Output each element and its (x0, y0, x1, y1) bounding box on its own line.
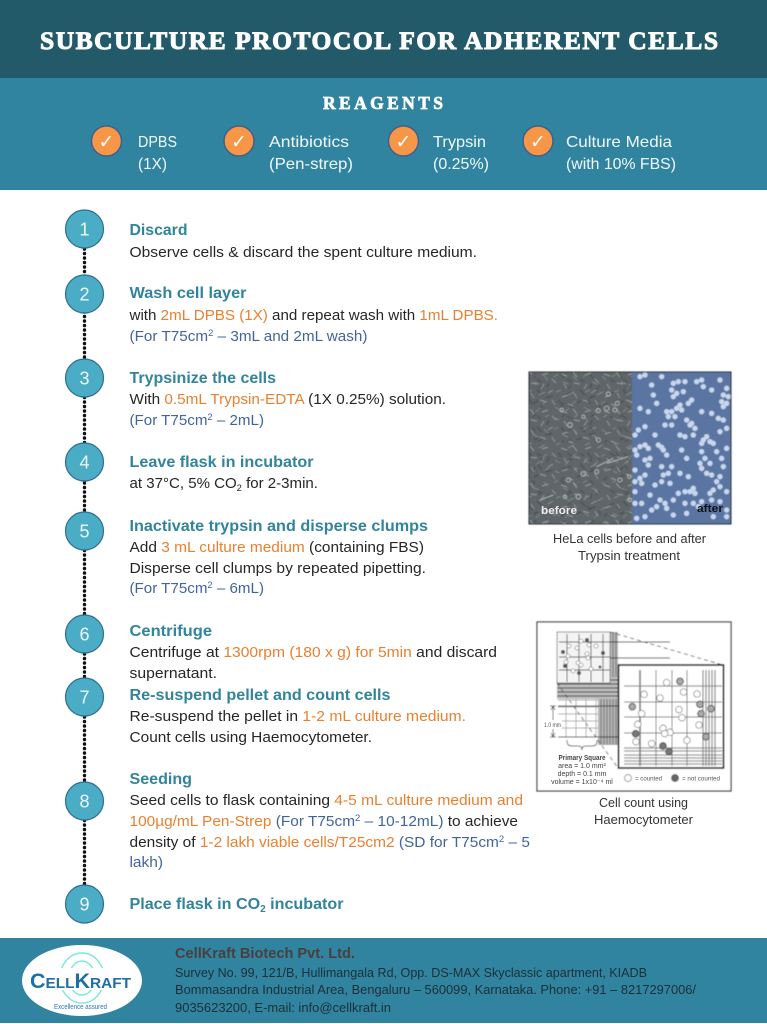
header banner (0, 0, 767, 78)
step 8: Seeding (130, 771, 192, 788)
step 7: 7 (79, 688, 90, 708)
step 8: 2 (355, 813, 360, 823)
step 3: With 0.5mL Trypsin-EDTA (1X 0.25%) solution. (130, 392, 446, 408)
step 9: Place flask in CO (130, 896, 259, 913)
step 5: Disperse cell clumps by repeated pipetting. (130, 561, 426, 577)
step 9 (66, 885, 344, 923)
caption: HeLa cells before and after (553, 531, 707, 546)
step 1: Discard (130, 222, 188, 239)
step 9: 2 (260, 904, 266, 915)
step 2: (For T75cm (130, 329, 204, 345)
light primary square (557, 632, 610, 683)
step 1: 1 (79, 220, 90, 240)
step 4: 4 (79, 452, 90, 472)
diagram labels: area = 1.0 mm² (558, 763, 606, 770)
dashed zoom lines (557, 632, 723, 768)
reagent: antibiotics: ✓ (231, 131, 247, 153)
step 6: 6 (79, 624, 90, 644)
step 2: – 3mL and 2mL wash) (213, 329, 368, 345)
step 4: for 2-3min. (242, 476, 318, 492)
reagent: antibiotics: Antibiotics (269, 134, 349, 151)
step 2: with 2mL DPBS (1X) and repeat wash with 1mL DPBS. (128, 308, 498, 324)
step 8: lakh) (130, 855, 163, 871)
figure: HeLa cells before and after trypsin (529, 372, 731, 563)
step 8: 8 (79, 792, 90, 812)
step 5: 5 (79, 522, 90, 542)
diagram labels: volume = 1x10⁻⁴ ml (551, 779, 613, 786)
reagent: antibiotics (224, 126, 353, 173)
panel: reagents (0, 78, 767, 190)
step 8: density of 1-2 lakh viable cells/T25cm2 (SD for T75cm (130, 835, 493, 851)
step 4: Leave flask in incubator (130, 454, 314, 471)
reagent: DPBS: ✓ (99, 131, 114, 153)
haemocytometer diagram (537, 622, 731, 791)
diagram labels: depth = 0.1 mm (558, 771, 607, 778)
step 9: 9 (79, 894, 90, 914)
step 3: 2 (207, 412, 213, 422)
caption: Haemocytometer (594, 812, 694, 827)
reagent: trypsin (388, 126, 489, 173)
step 8: to achieve (447, 814, 514, 830)
step 1: Observe cells & discard the spent culture medium. (130, 245, 477, 261)
step 3: 3 (79, 368, 90, 388)
company name: CellKraft Biotech Pvt. Ltd. (175, 946, 355, 962)
step 5: (For T75cm (130, 581, 204, 597)
step 5: 2 (207, 580, 213, 590)
logo: CellKraft (22, 945, 142, 1016)
inset enlarged square (618, 665, 724, 768)
step 6 (66, 615, 497, 682)
step 2: Wash cell layer (130, 285, 246, 302)
logo: CellKraft: CELLKRAFT (30, 970, 131, 993)
step 2 (66, 275, 498, 345)
reagent: DPBS (92, 126, 177, 173)
step 5: Add 3 mL culture medium (containing FBS) (130, 540, 424, 556)
step 4: 2 (237, 483, 242, 493)
step 3: – 2mL) (213, 413, 264, 429)
title: SUBCULTURE PROTOCOL FOR ADHERENT CELLS (40, 26, 718, 55)
step 4 (66, 443, 318, 493)
step 3: (For T75cm (130, 413, 204, 429)
reagent: trypsin: ✓ (396, 131, 411, 153)
timeline connector (83, 240, 86, 895)
address text: 9035623200, E-mail: info@cellkraft.in (175, 1000, 391, 1015)
step 2: 2 (79, 284, 90, 304)
address text (175, 965, 696, 1015)
diagram labels: 1.0 mm (544, 723, 561, 729)
reagent: DPBS: DPBS (138, 134, 177, 151)
label: after: after (697, 503, 724, 515)
address text: Bommasandra Industrial Area, Bengaluru – 560099, Karnataka. Phone: +91 – 8217297006/ (175, 982, 696, 997)
diagram labels: = not counted (682, 776, 720, 782)
caption: Trypsin treatment (578, 548, 680, 563)
step 7: Re-suspend the pellet in 1-2 mL culture medium. (130, 709, 466, 725)
diagram labels: = counted (635, 776, 662, 782)
step 3: Trypsinize the cells (130, 370, 276, 387)
step 6: supernatant. (130, 666, 217, 682)
address text: Survey No. 99, 121/B, Hullimangala Rd, Opp. DS-MAX Skyclassic apartment, KIADB (175, 965, 647, 980)
reagent: trypsin: Trypsin (433, 134, 486, 151)
step 8: 2 (499, 834, 504, 844)
step 7: Count cells using Haemocytometer. (130, 730, 372, 746)
step 1 (66, 210, 477, 261)
logo: CellKraft: Excellence assured (54, 1004, 107, 1011)
step 8: – 5 (504, 835, 530, 851)
step 6: Centrifuge (130, 623, 212, 640)
step 9: incubator (266, 896, 344, 913)
micrograph (529, 372, 731, 524)
1.0 mm scale arrow (550, 706, 556, 737)
reagent: culture media (523, 126, 676, 173)
counted and not counted cells (629, 678, 714, 755)
diagram labels: Primary Square (558, 755, 606, 762)
step 5 (66, 512, 428, 597)
reagent: culture media: ✓ (530, 131, 546, 153)
step 8: 100µg/mL Pen-Strep (For T75cm (130, 814, 350, 830)
step 2: 2 (208, 328, 213, 338)
caption (553, 531, 707, 563)
step 7 (66, 678, 466, 746)
step 3 (66, 359, 446, 429)
legend circles (624, 774, 632, 782)
step 8: – 10-12mL) (360, 814, 443, 830)
caption: Cell count using (599, 795, 688, 810)
step 8: Seed cells to flask containing 4-5 mL culture medium and (130, 793, 523, 809)
reagent: culture media: (with 10% FBS) (566, 156, 676, 173)
figure: haemocytometer cell count (537, 622, 731, 827)
caption (594, 795, 694, 827)
step 5: Inactivate trypsin and disperse clumps (130, 518, 428, 535)
reagent: DPBS: (1X) (138, 156, 167, 173)
step 8 (66, 771, 530, 871)
primary square brace (567, 740, 597, 750)
step 7: Re-suspend pellet and count cells (130, 687, 391, 704)
panel: footer (0, 938, 767, 1023)
reagent: culture media: Culture Media (566, 134, 672, 151)
reagents heading: REAGENTS (323, 93, 443, 113)
diagram labels (543, 720, 720, 786)
step 4: at 37°C, 5% CO (130, 476, 233, 492)
outer grid (558, 640, 618, 737)
step 6: Centrifuge at 1300rpm (180 x g) for 5min and discard (130, 645, 497, 661)
label: before: before (541, 505, 577, 517)
reagent: antibiotics: (Pen-strep) (269, 156, 353, 173)
reagent: trypsin: (0.25%) (433, 156, 489, 173)
step 5: – 6mL) (213, 581, 264, 597)
